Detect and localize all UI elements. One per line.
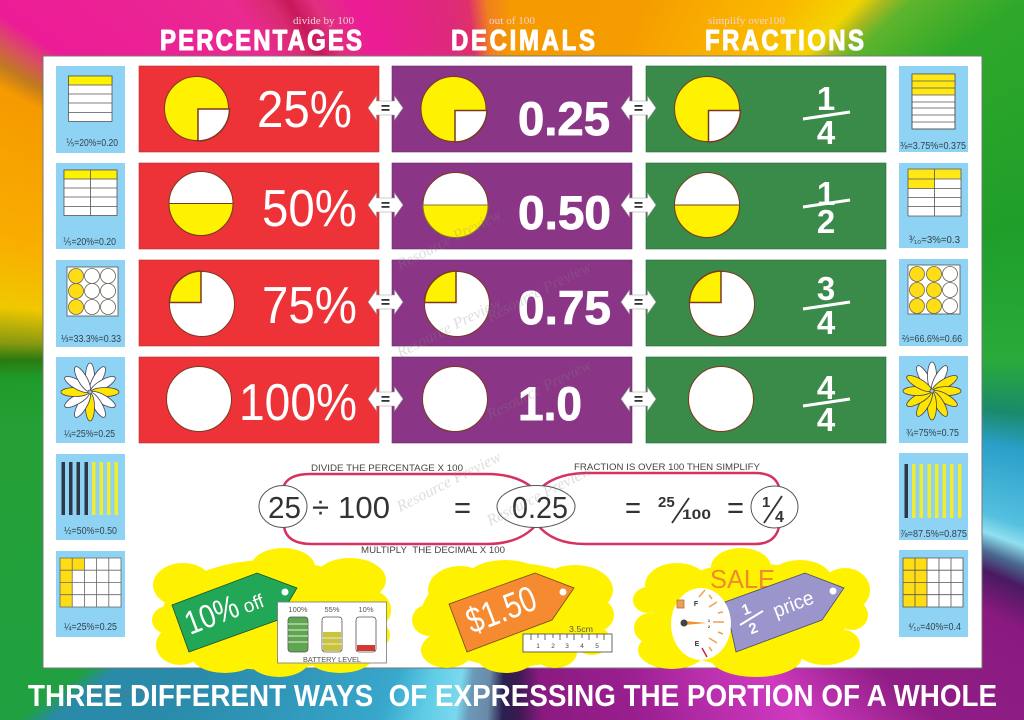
side card: one fifth list [56,66,125,153]
equation: percentage, decimal and fraction conversion: ÷ 100 [312,490,390,525]
ruler: 3.5cm: 2 [551,643,555,650]
panel: 0.75 decimal [392,260,632,346]
faint watermark: Resource Preview [483,462,594,530]
faint watermark: Resource Preview [393,206,504,274]
side card: one fifth table: ⅕=20%=0.20 [63,237,116,248]
panel: one quarter fraction: 4 [817,114,836,151]
chart: battery level [278,602,386,664]
heading: decimals: DECIMALS [451,24,595,57]
equation: percentage, decimal and fraction conversion: 25 [268,490,301,525]
ruler: 3.5cm: 4 [580,643,584,650]
arrow: equals row 3 right [621,290,656,314]
cloud: half price sale [633,548,870,677]
panel: 75 percent [139,260,379,346]
equation: percentage, decimal and fraction conversion [259,462,798,556]
heading: fractions: FRACTIONS [705,24,864,57]
heading: percentages: PERCENTAGES [160,24,362,57]
tag: half price: price [770,587,817,622]
arrow: equals row 3 left [368,290,403,314]
cloud: discount [152,548,391,677]
panel: 0.50 decimal [392,163,632,249]
panel: 25 percent [139,66,379,152]
faint watermark: Resource Preview [483,356,594,424]
side card: half bars: ½=50%=0.50 [64,526,117,537]
equation: percentage, decimal and fraction conversion: = [625,490,641,525]
equation: percentage, decimal and fraction conversion: 100 [682,506,711,522]
icon: fuel gauge: 1 [708,618,711,623]
equation: percentage, decimal and fraction conversion: 1 [762,494,770,511]
panel: 1.0 decimal: 1.0 [518,377,582,430]
faint watermark: Resource Preview [393,448,504,516]
icon: fuel gauge: 2 [708,624,711,629]
icon: fuel gauge: F [694,601,699,608]
side card: seven eighths bars: ⅞=87.5%=0.875 [900,529,967,540]
panel: 25 percent: 25% [257,81,352,139]
ruler: 3.5cm: 3 [565,643,569,650]
side card: four tenths grid [899,550,968,637]
side card: one fifth list: ⅕=20%=0.20 [66,138,118,149]
panel: 100 percent: 100% [239,374,357,432]
side card: half bars [56,454,125,540]
panel: four quarters fraction: 4 [817,369,836,406]
side card: two thirds circles: ⅔=66.6%=0.66 [902,334,962,345]
side card: one third circles: ⅓=33.3%=0.33 [61,334,121,345]
side card: quarter grid [56,551,125,637]
chart: battery level: 55% [324,605,340,614]
panel: 50 percent: 50% [262,180,357,238]
panel: one quarter fraction: 1 [817,80,835,117]
label: sale: SALE [710,564,775,594]
panel: one quarter fraction [646,66,886,152]
panel: 0.75 decimal: 0.75 [518,281,611,334]
tag: half price: 2 [746,619,760,638]
equation: percentage, decimal and fraction conversion: = [727,490,744,525]
ruler: 3.5cm [523,625,612,652]
tag: $1.50 [449,573,574,652]
chart: battery level: BATTERY LEVEL [303,655,361,664]
tag: half price: 1 [739,600,753,619]
footer faint text: Resources [88,685,151,700]
side card: flower one quarter: ¼=25%=0.25 [64,428,115,440]
faint watermark: Resource Preview [393,294,504,362]
arrow: equals row 1 left [368,96,403,120]
tag: 10% off [172,573,297,652]
panel: 0.25 decimal [392,66,632,152]
side card: three tenths table: ³⁄₁₀=3%=0.3 [909,235,960,246]
ruler: 3.5cm: 1 [536,643,540,650]
panel: one half fraction: 2 [817,203,835,240]
equation: percentage, decimal and fraction conversion: 0.25 [512,490,568,525]
panel: three quarters fraction: 3 [817,270,835,307]
panel: 100 percent [139,357,379,443]
side card: two thirds circles [899,259,968,346]
arrow: equals row 1 right [621,96,656,120]
arrow: equals row 2 right [621,193,656,217]
equation: percentage, decimal and fraction conversion: = [454,490,471,525]
side card: seven eighths bars [899,453,968,540]
faint watermark [393,206,594,530]
panel: 0.25 decimal: 0.25 [518,92,610,145]
heading: decimals: out of 100 [489,16,535,27]
tag: half price [725,573,844,652]
ruler: 3.5cm: 5 [595,643,599,650]
equation: percentage, decimal and fraction conversion: DIVIDE THE PERCENTAGE X 100 [311,463,463,474]
panel: 50 percent [139,163,379,249]
heading: fractions: simplify over100 [708,16,785,27]
side card: three tenths table [899,163,968,248]
side card: flower one quarter [56,357,125,443]
icon: fuel gauge: E [695,641,700,648]
icon: fuel gauge [671,588,731,660]
tag: 10% off: off [240,591,268,618]
panel: four quarters fraction [646,357,886,443]
faint watermark: Resource Preview [483,258,594,326]
panel: 75 percent: 75% [262,277,357,335]
arrow: equals row 2 left [368,193,403,217]
side card: flower three quarters: ¾=75%=0.75 [906,428,959,439]
tag: $1.50: $1.50 [460,577,542,641]
side card: three eighths list: ⅜=3.75%=0.375 [900,141,966,152]
equation: percentage, decimal and fraction conversion: 4 [775,509,784,526]
arrow: equals row 4 left [368,387,403,411]
panel: white sheet [43,56,982,668]
panel: three quarters fraction: 4 [817,304,836,341]
arrow: equals row 4 right [621,387,656,411]
chart: battery level: 100% [288,605,308,614]
side card: quarter grid: ¼=25%=0.25 [64,621,117,633]
panel: 0.50 decimal: 0.50 [518,186,611,239]
heading: percentages: divide by 100 [293,16,354,27]
cloud: price [412,560,614,673]
side card: four tenths grid: ⁴⁄₁₀=40%=0.4 [908,622,961,633]
side card: three eighths list [899,66,968,152]
side card: one third circles [56,260,125,347]
panel: three quarters fraction [646,260,886,346]
panel: one half fraction [646,163,886,249]
equation: percentage, decimal and fraction conversion: MULTIPLY THE DECIMAL X 100 [361,545,505,556]
chart: battery level: 10% [358,605,374,614]
equation: percentage, decimal and fraction conversion: FRACTION IS OVER 100 THEN SIMPLIFY [574,462,761,473]
tag: 10% off: 10% [179,587,244,642]
ruler: 3.5cm: 3.5cm [569,625,593,634]
panel: 1.0 decimal [392,357,632,443]
equation: percentage, decimal and fraction conversion: 25 [658,494,675,511]
side card: flower three quarters [899,356,968,443]
panel: four quarters fraction: 4 [817,401,836,438]
panel: one half fraction: 1 [817,175,835,212]
side card: one fifth table [56,163,125,249]
